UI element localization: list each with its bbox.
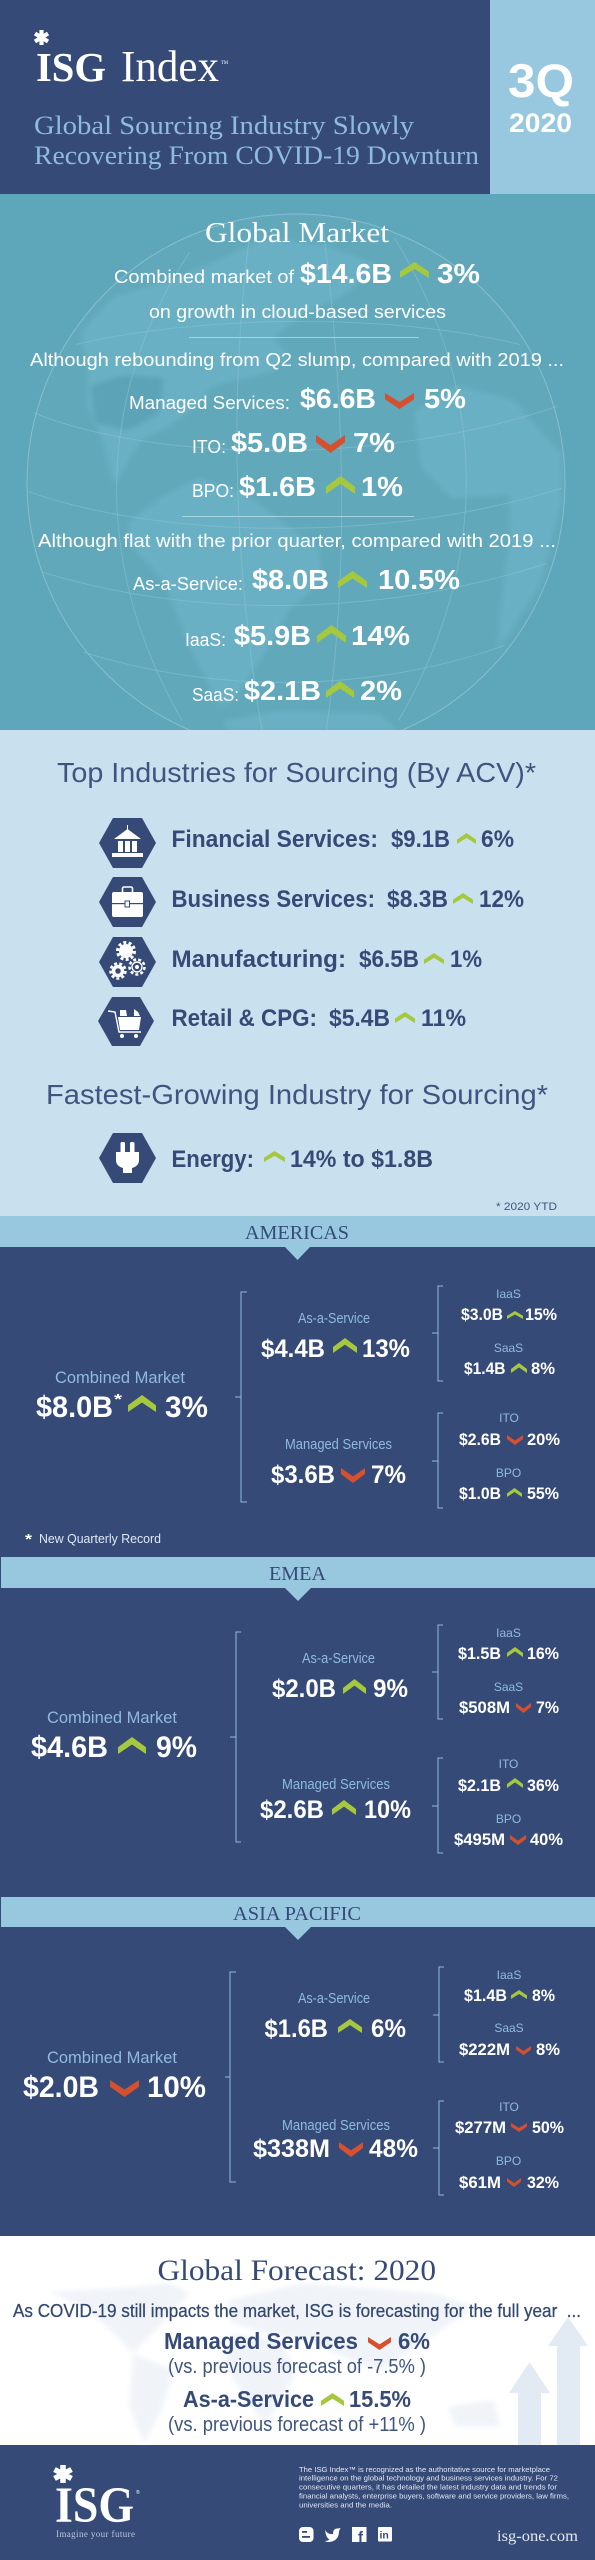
stat: managed services: 5% bbox=[424, 383, 466, 414]
heading: fastest-growing industry: Fastest-Growing Industry for Sourcing* bbox=[46, 1079, 548, 1110]
banner: americas bbox=[0, 1216, 595, 1260]
stat: IaaS: $1.4B bbox=[464, 1986, 507, 2005]
stat: ITO: $2.1B bbox=[458, 1776, 501, 1795]
stat: ITO: $5.0B bbox=[231, 427, 308, 458]
stat: BPO: 32% bbox=[527, 2173, 559, 2192]
stat: managed services: Managed Services: bbox=[129, 392, 290, 413]
icon: briefcase bbox=[99, 877, 156, 927]
stat: as-a-service bbox=[261, 1311, 410, 1363]
stat: ITO: 20% bbox=[527, 1430, 560, 1449]
icon: linkedin bbox=[378, 2527, 392, 2542]
text: about ISG Index: The ISG Index™ is recognized as the authoritative source for marketplace bbox=[299, 2465, 550, 2474]
panel: emea bbox=[1, 1557, 595, 1853]
stat: managed services: Managed Services bbox=[285, 1437, 392, 1453]
stat: BPO: $495M bbox=[454, 1830, 505, 1849]
logo: ISG Index: Index bbox=[121, 42, 219, 91]
stat: BPO: $1.6B bbox=[239, 471, 316, 502]
text: about ISG Index: financial analysts, enterprise buyers, software and service providers, law firms, bbox=[299, 2492, 569, 2500]
panel: header bbox=[0, 0, 490, 194]
footnote: new quarterly record: * bbox=[25, 1531, 32, 1548]
stat: combined market: 3% bbox=[437, 258, 480, 289]
stat: as-a-service: $2.0B bbox=[272, 1675, 336, 1703]
stat: SaaS: $2.1B bbox=[244, 675, 321, 706]
icon: blogger bbox=[299, 2527, 314, 2542]
text: rebound note: Although rebounding from Q2 slump, compared with 2019 ... bbox=[30, 349, 564, 370]
logo: ISG Index bbox=[35, 30, 229, 91]
panel: global forecast bbox=[0, 2236, 595, 2445]
title: Recovering From COVID-19 Downturn bbox=[34, 140, 479, 170]
stat: as-a-service: As-a-Service bbox=[298, 1991, 370, 2007]
row: manufacturing: Manufacturing: bbox=[172, 946, 346, 973]
stat: managed services bbox=[271, 1437, 406, 1489]
stat: IaaS: $1.5B bbox=[458, 1644, 501, 1663]
row: business services: Business Services: bbox=[172, 886, 375, 913]
stat: managed services: $338M bbox=[253, 2135, 330, 2163]
text: forecast intro: As COVID-19 still impacts the market, ISG is forecasting for the full year ... bbox=[13, 2301, 581, 2321]
row: energy: 14% to $1.8B bbox=[290, 1146, 433, 1173]
row: energy: Energy: bbox=[172, 1146, 254, 1173]
banner: americas: AMERICAS bbox=[245, 1222, 349, 1244]
panel: quarter badge bbox=[490, 0, 595, 194]
stat: ITO: ITO bbox=[499, 1757, 518, 1771]
stat: combined market: Combined Market bbox=[55, 1368, 185, 1387]
row: business services: $8.3B bbox=[387, 886, 448, 913]
stat: IaaS: IaaS: bbox=[185, 629, 226, 650]
stat: ITO bbox=[459, 1411, 560, 1449]
logo: ISG: ® bbox=[136, 2489, 140, 2496]
icon: linkedin: in bbox=[380, 2530, 389, 2542]
stat: as-a-service: 10.5% bbox=[378, 564, 460, 595]
stat: SaaS: $222M bbox=[459, 2040, 510, 2059]
stat: ITO: 7% bbox=[353, 427, 395, 458]
panel: footer bbox=[0, 2445, 595, 2560]
stat: managed services forecast: Managed Services bbox=[164, 2328, 358, 2354]
stat: SaaS: SaaS bbox=[494, 2021, 524, 2035]
stat: IaaS bbox=[458, 1626, 559, 1663]
stat: combined market: Combined Market bbox=[47, 1708, 177, 1727]
banner: asia pacific bbox=[1, 1897, 595, 1940]
stat: SaaS: 2% bbox=[360, 675, 402, 706]
stat: combined market: $14.6B bbox=[300, 258, 392, 289]
stat: IaaS: IaaS bbox=[496, 1626, 521, 1640]
row: retail: $5.4B bbox=[329, 1005, 390, 1032]
stat: combined market bbox=[114, 258, 480, 289]
stat: BPO bbox=[192, 471, 403, 502]
logo: ISG: Imagine your future bbox=[56, 2529, 135, 2539]
stat: as-a-service: 6% bbox=[371, 2015, 406, 2043]
stat: managed services: 10% bbox=[364, 1796, 411, 1824]
stat: as-a-service: $8.0B bbox=[252, 564, 329, 595]
stat: BPO: 55% bbox=[527, 1484, 559, 1503]
stat: IaaS: $3.0B bbox=[461, 1305, 503, 1324]
stat: ITO bbox=[455, 2100, 564, 2137]
stat: BPO: 1% bbox=[361, 471, 403, 502]
stat: as-a-service forecast: As-a-Service bbox=[183, 2386, 314, 2412]
panel: global market bbox=[0, 194, 595, 752]
stat: combined market: $2.0B bbox=[23, 2071, 99, 2104]
stat: IaaS: IaaS bbox=[497, 1968, 521, 1982]
stat: ITO: ITO: bbox=[192, 436, 226, 457]
stat: BPO: 40% bbox=[530, 1830, 563, 1849]
stat: ITO: 36% bbox=[527, 1776, 559, 1795]
stat: ITO: $277M bbox=[455, 2118, 506, 2137]
stat: BPO: BPO bbox=[496, 2154, 521, 2168]
stat: SaaS bbox=[459, 1680, 559, 1717]
stat: ITO: 50% bbox=[532, 2118, 564, 2137]
stat: IaaS bbox=[461, 1287, 557, 1324]
link: website: isg-one.com bbox=[497, 2528, 579, 2545]
row: manufacturing: $6.5B bbox=[359, 946, 419, 973]
banner: emea: EMEA bbox=[269, 1563, 327, 1585]
stat: BPO: BPO: bbox=[192, 480, 234, 501]
banner: asia pacific: ASIA PACIFIC bbox=[233, 1903, 361, 1925]
text: cloud growth: on growth in cloud-based services bbox=[149, 301, 446, 322]
stat: as-a-service forecast bbox=[168, 2386, 426, 2436]
row: financial services: Financial Services: bbox=[172, 826, 378, 853]
stat: IaaS: 15% bbox=[525, 1305, 557, 1324]
stat: combined market: 10% bbox=[147, 2071, 206, 2104]
panel: asia pacific bbox=[1, 1897, 595, 2195]
stat: as-a-service forecast: 15.5% bbox=[349, 2386, 411, 2412]
footnote: 2020 YTD: * 2020 YTD bbox=[496, 1201, 557, 1213]
stat: managed services forecast: 6% bbox=[398, 2328, 430, 2354]
stat: managed services bbox=[260, 1777, 411, 1824]
stat: as-a-service: 13% bbox=[362, 1335, 410, 1363]
panel: top industries bbox=[0, 730, 595, 1217]
text: about ISG Index: intelligence on the global technology and business services industry. For 72 bbox=[299, 2474, 558, 2482]
stat: ITO bbox=[192, 427, 395, 458]
stat: managed services: 48% bbox=[369, 2135, 418, 2163]
stat: as-a-service bbox=[133, 564, 460, 595]
stat: BPO: BPO bbox=[496, 1466, 521, 1480]
stat: ITO: $2.6B bbox=[459, 1430, 501, 1449]
icon: twitter bbox=[325, 2528, 340, 2542]
stat: BPO: $1.0B bbox=[459, 1484, 501, 1503]
stat: as-a-service: $1.6B bbox=[264, 2015, 328, 2043]
title: Global Sourcing Industry Slowly bbox=[34, 110, 415, 140]
stat: as-a-service bbox=[264, 1991, 406, 2043]
row: energy bbox=[99, 1133, 433, 1183]
row: retail: Retail & CPG: bbox=[172, 1005, 317, 1032]
stat: managed services: Managed Services bbox=[282, 2118, 390, 2134]
banner: emea bbox=[1, 1557, 595, 1601]
stat: SaaS: SaaS: bbox=[192, 684, 239, 705]
stat: SaaS: SaaS bbox=[494, 1341, 523, 1355]
stat: managed services: $6.6B bbox=[300, 383, 376, 414]
icon: facebook bbox=[352, 2527, 366, 2546]
stat: SaaS: 8% bbox=[536, 2040, 560, 2059]
logo: ISG Index: ISG bbox=[36, 44, 106, 90]
stat: combined market: * bbox=[114, 1391, 122, 1408]
panel: quarter badge: 3Q bbox=[508, 54, 574, 107]
row: business services bbox=[99, 877, 524, 927]
stat: SaaS bbox=[459, 2021, 560, 2059]
stat: managed services: Managed Services bbox=[282, 1777, 390, 1793]
stat: ITO: ITO bbox=[499, 2100, 519, 2114]
stat: IaaS: $5.9B bbox=[234, 620, 311, 651]
stat: as-a-service: As-a-Service bbox=[298, 1311, 370, 1327]
stat: IaaS bbox=[185, 620, 410, 651]
stat: managed services bbox=[129, 383, 466, 414]
row: retail bbox=[98, 997, 466, 1046]
stat: as-a-service forecast: (vs. previous forecast of +11% ) bbox=[168, 2414, 426, 2436]
panel: quarter badge: 2020 bbox=[509, 108, 572, 138]
stat: IaaS: 14% bbox=[351, 620, 410, 651]
stat: combined market bbox=[31, 1708, 197, 1764]
icon: plug bbox=[99, 1133, 156, 1183]
logo: ISG: ISG bbox=[55, 2478, 134, 2534]
stat: IaaS: 16% bbox=[527, 1644, 559, 1663]
stat: SaaS bbox=[464, 1341, 555, 1378]
row: business services: 12% bbox=[479, 886, 524, 913]
stat: ITO: ITO bbox=[499, 1411, 519, 1425]
stat: SaaS: 7% bbox=[536, 1698, 559, 1717]
stat: managed services bbox=[253, 2118, 418, 2163]
stat: managed services: $3.6B bbox=[271, 1461, 335, 1489]
stat: combined market bbox=[23, 2048, 206, 2104]
row: financial services bbox=[99, 818, 514, 868]
icon: facebook: f bbox=[358, 2529, 364, 2546]
footnote: new quarterly record: New Quarterly Record bbox=[39, 1532, 161, 1546]
heading: global forecast: Global Forecast: 2020 bbox=[158, 2254, 436, 2287]
text: flat note: Although flat with the prior quarter, compared with 2019 ... bbox=[38, 530, 556, 551]
stat: as-a-service: $4.4B bbox=[261, 1335, 325, 1363]
text: about ISG Index bbox=[299, 2465, 569, 2510]
logo: ISG Index: TM bbox=[221, 61, 229, 66]
row: manufacturing: 1% bbox=[450, 946, 482, 973]
icon: bank bbox=[99, 818, 156, 868]
stat: BPO bbox=[459, 1466, 559, 1503]
stat: BPO: $61M bbox=[459, 2173, 501, 2192]
stat: SaaS bbox=[192, 675, 402, 706]
text: about ISG Index: consecutive quarters, it has detailed the latest industry data and trends for bbox=[299, 2482, 558, 2492]
stat: combined market: $4.6B bbox=[31, 1731, 108, 1764]
stat: BPO bbox=[454, 1812, 563, 1849]
stat: combined market bbox=[36, 1368, 208, 1424]
icon: growth arrows bbox=[509, 2317, 588, 2445]
stat: SaaS: SaaS bbox=[494, 1680, 523, 1694]
panel: americas bbox=[0, 1216, 595, 1548]
row: financial services: $9.1B bbox=[391, 826, 450, 853]
row: retail: 11% bbox=[421, 1005, 466, 1032]
row: financial services: 6% bbox=[481, 826, 514, 853]
stat: combined market: Combined market of bbox=[114, 266, 295, 287]
stat: as-a-service: As-a-Service: bbox=[133, 573, 243, 594]
stat: combined market: 9% bbox=[156, 1731, 197, 1764]
row: manufacturing bbox=[99, 937, 482, 987]
icon: gears bbox=[99, 937, 156, 987]
title bbox=[34, 110, 479, 170]
stat: as-a-service bbox=[272, 1651, 408, 1703]
icon: cart bbox=[98, 997, 154, 1046]
stat: managed services: 7% bbox=[371, 1461, 406, 1489]
stat: managed services: $2.6B bbox=[260, 1796, 324, 1824]
stat: IaaS: IaaS bbox=[496, 1287, 521, 1301]
stat: SaaS: 8% bbox=[531, 1359, 555, 1378]
globe background bbox=[27, 214, 565, 752]
text: about ISG Index: universities and the media. bbox=[299, 2500, 392, 2510]
stat: BPO bbox=[459, 2154, 559, 2192]
heading: global market: Global Market bbox=[205, 217, 389, 249]
stat: combined market: $8.0B bbox=[36, 1391, 113, 1424]
stat: combined market: Combined Market bbox=[47, 2048, 177, 2067]
stat: BPO: BPO bbox=[496, 1812, 521, 1826]
background: world map bbox=[49, 2283, 501, 2443]
stat: SaaS: $1.4B bbox=[464, 1359, 506, 1378]
stat: ITO bbox=[458, 1757, 559, 1795]
stat: SaaS: $508M bbox=[459, 1698, 510, 1717]
stat: as-a-service: 9% bbox=[373, 1675, 408, 1703]
stat: IaaS: 8% bbox=[532, 1986, 555, 2005]
heading: top industries: Top Industries for Sourcing (By ACV)* bbox=[57, 757, 536, 788]
stat: as-a-service: As-a-Service bbox=[302, 1651, 375, 1667]
stat: combined market: 3% bbox=[165, 1391, 208, 1424]
stat: managed services forecast bbox=[164, 2328, 430, 2378]
stat: managed services forecast: (vs. previous forecast of -7.5% ) bbox=[168, 2356, 426, 2378]
stat: IaaS bbox=[464, 1968, 555, 2005]
panel: regions background bbox=[0, 1247, 595, 2236]
